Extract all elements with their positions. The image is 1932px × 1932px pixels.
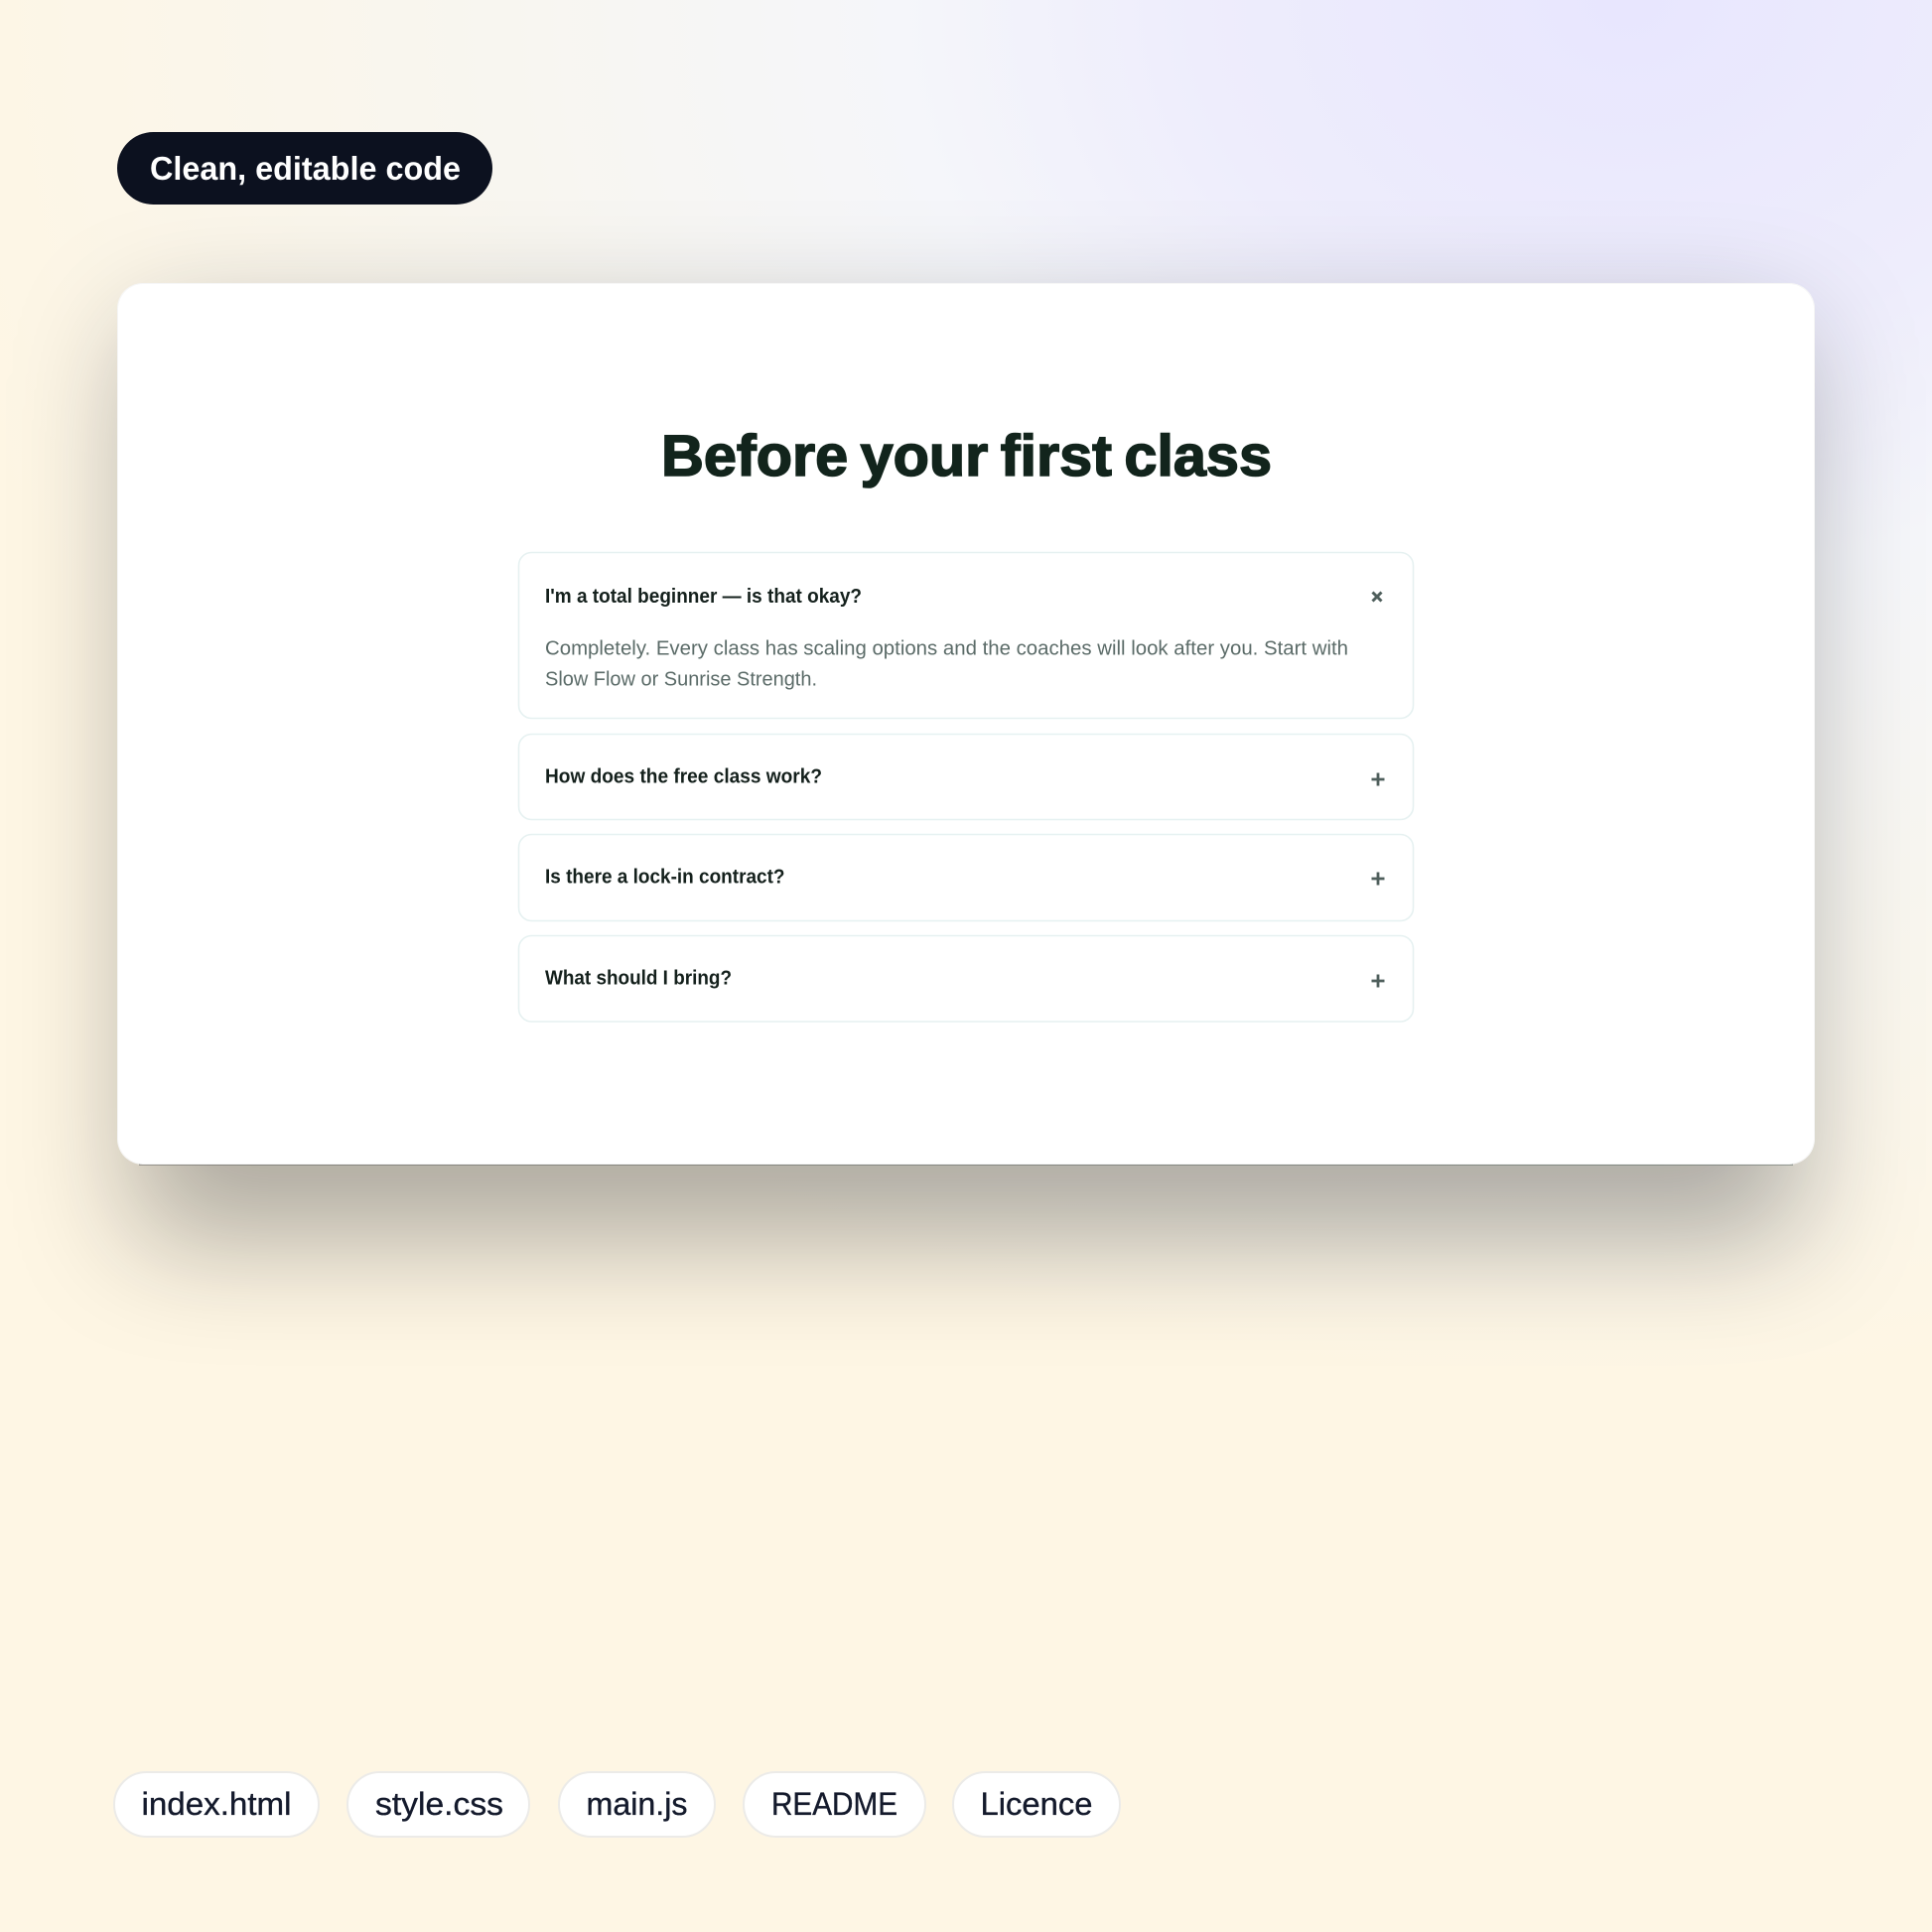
faq item: total beginner (open): Completely. Every class has scaling options and the coaches will look after you. Start with (545, 637, 1348, 659)
file chip: index.html (114, 1772, 319, 1837)
heading: Before your first class: Before your first class (661, 424, 1272, 488)
badge: Clean, editable code (117, 132, 492, 205)
badge: Clean, editable code: Clean, editable code (150, 150, 461, 187)
icon: close (1372, 592, 1382, 602)
faq item: free class: How does the free class work? (545, 766, 822, 788)
file chip: style.css: style.css (375, 1786, 503, 1822)
icon: plus (1372, 975, 1384, 987)
file chip: style.css (347, 1772, 529, 1837)
file chip: main.js (559, 1772, 715, 1837)
faq item: total beginner (open): Slow Flow or Sunrise Strength. (545, 669, 817, 691)
file chip: Licence: Licence (981, 1786, 1092, 1822)
panel: preview card (117, 283, 1815, 1166)
faq item: lock-in contract: Is there a lock-in contract? (545, 866, 784, 888)
faq item: lock-in contract (518, 834, 1414, 921)
file chip: main.js: main.js (586, 1786, 687, 1822)
faq item: total beginner (open): I'm a total beginner — is that okay? (545, 586, 862, 608)
faq item: total beginner (open) (518, 552, 1414, 719)
icon: plus (1372, 872, 1384, 886)
faq item: what to bring: What should I bring? (545, 967, 732, 989)
icon: plus (1372, 772, 1384, 786)
faq item: what to bring (518, 935, 1414, 1022)
file chip: README: README (771, 1786, 897, 1822)
faq item: free class (518, 735, 1414, 820)
file chip: README (744, 1772, 925, 1837)
file chip: index.html: index.html (141, 1786, 292, 1822)
file chip: Licence (953, 1772, 1120, 1837)
